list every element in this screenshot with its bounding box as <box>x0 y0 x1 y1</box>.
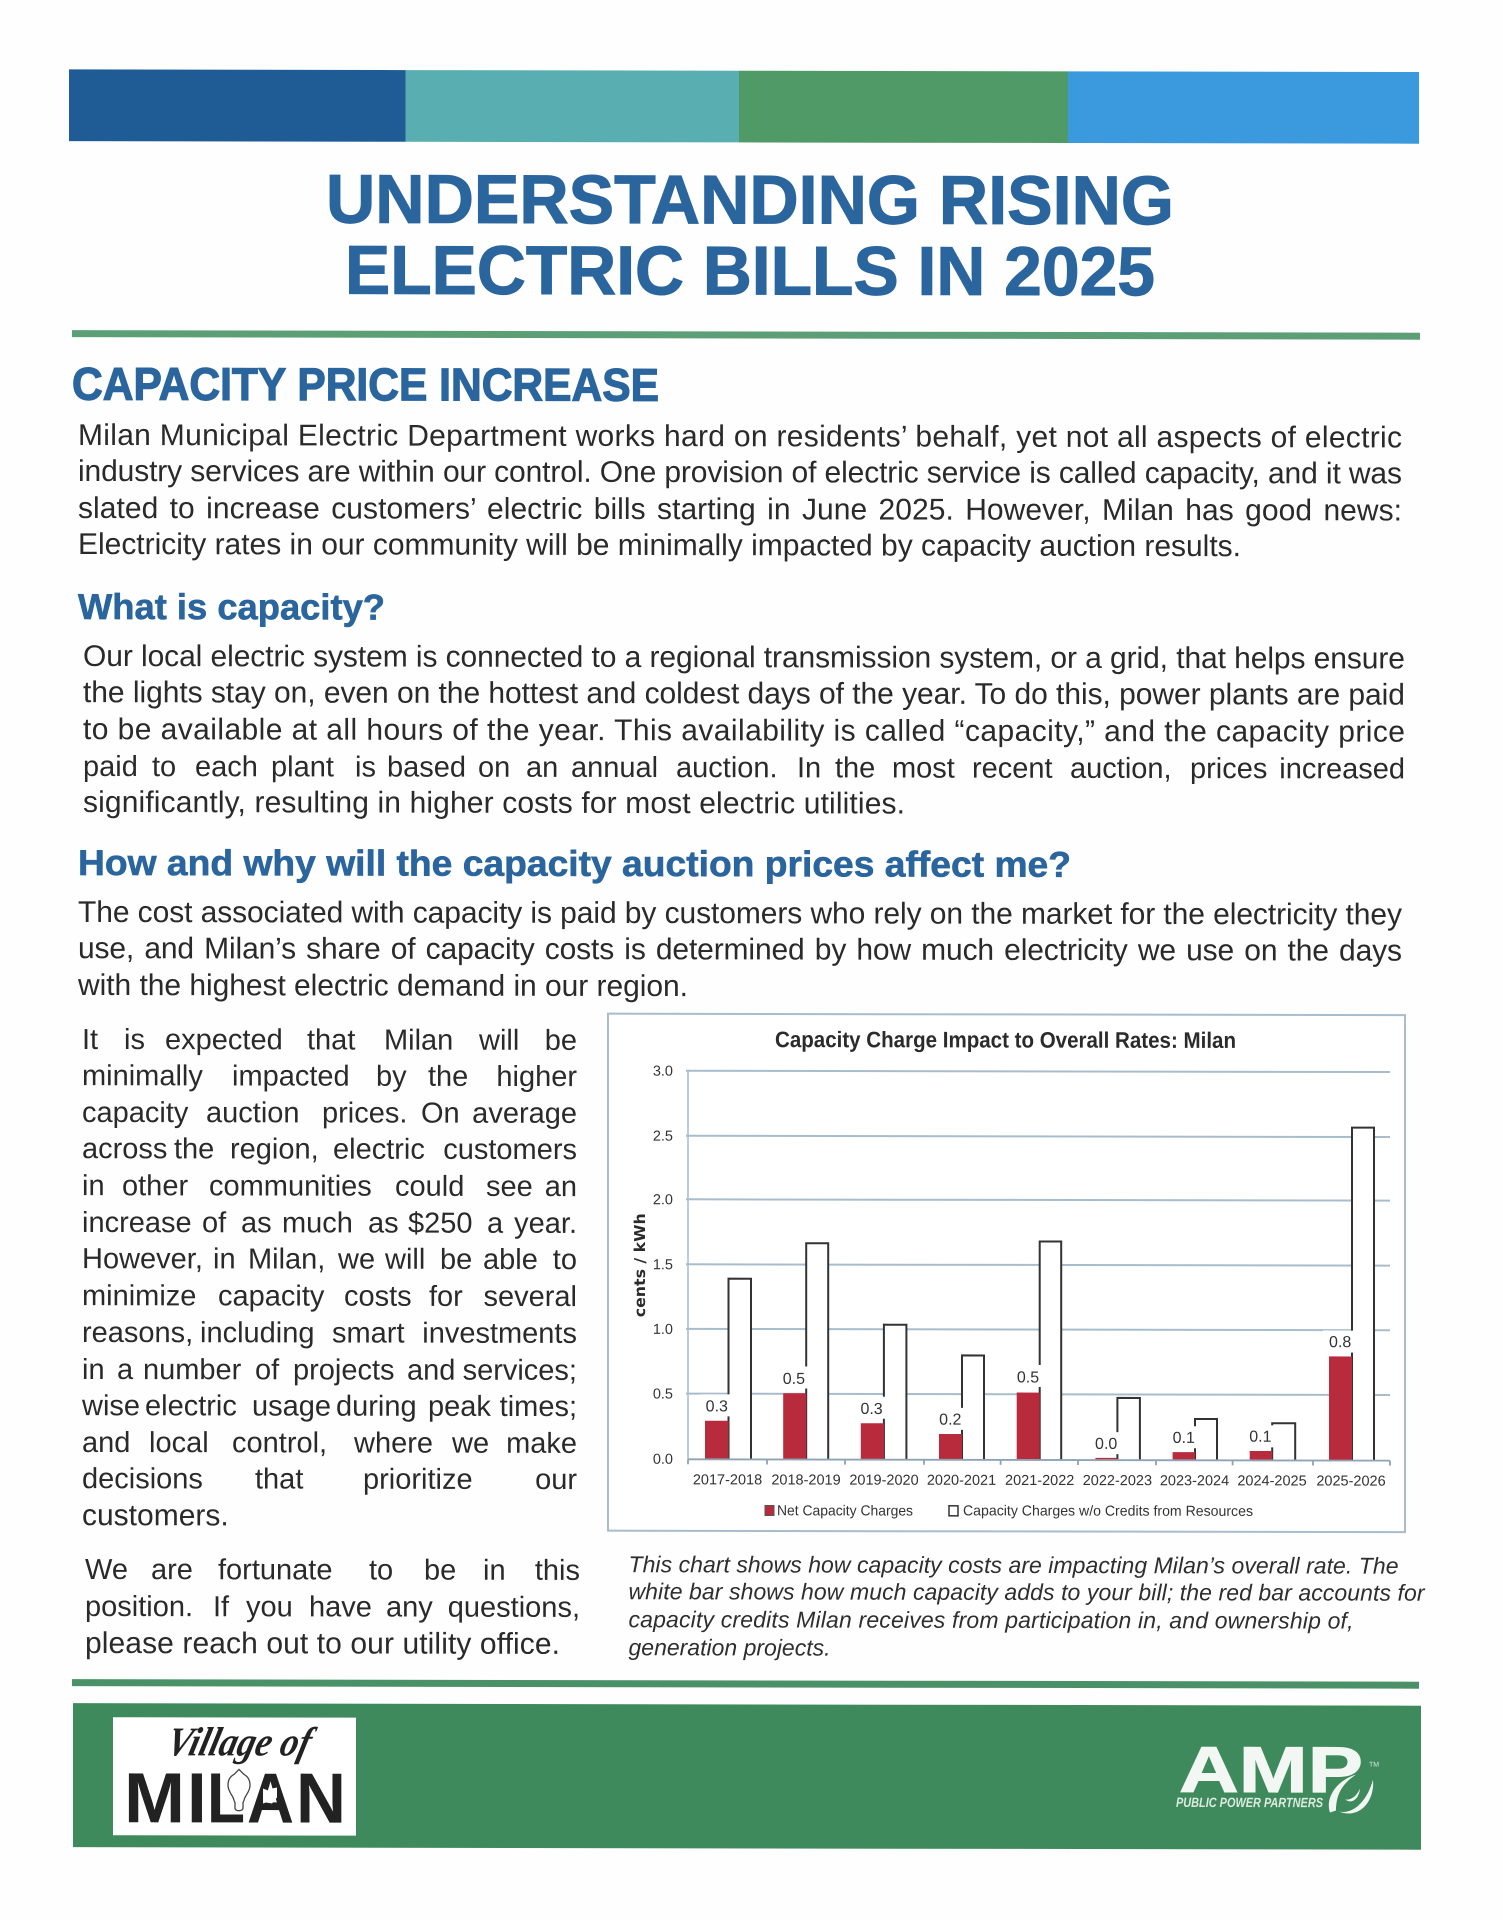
grid lines <box>686 1071 1390 1461</box>
paragraph: what is capacity: to <box>152 751 176 783</box>
left column paragraph: expected impact: customers. <box>82 1499 229 1532</box>
red bars: net capacity charges <box>705 1355 1352 1460</box>
logo: Village of Milan: N <box>296 1760 346 1839</box>
x axis labels: 2024-2025 <box>1237 1473 1307 1489</box>
left column paragraph: expected impact: projects <box>293 1354 395 1387</box>
title: ELECTRIC BILLS IN 2025 <box>345 232 1155 310</box>
logo: AMP Public Power Partners <box>1176 1733 1379 1814</box>
logo: AMP Public Power Partners: PUBLIC POWER PARTNERS <box>1176 1795 1323 1810</box>
paragraph: what is capacity: the lights stay on, even on the hottest and coldest days of the year. To do this, power plants are paid <box>83 676 1405 712</box>
chart caption <box>628 1551 1426 1662</box>
left column paragraph: expected impact: auction <box>206 1097 300 1129</box>
paragraph: what is capacity: prices <box>1190 753 1267 785</box>
paragraph: what is capacity: Our local electric system is connected to a regional transmission system, or a grid, that helps ensure <box>83 640 1405 675</box>
paragraph: what is capacity: each <box>195 751 258 783</box>
left column paragraph: expected impact: region, <box>230 1133 319 1166</box>
data labels: 0.2 <box>939 1412 962 1429</box>
left column paragraph: expected impact: that <box>255 1463 303 1496</box>
paragraph: what is capacity: the <box>835 752 875 784</box>
left column paragraph: fortunate position: We <box>85 1554 128 1586</box>
left column paragraph: expected impact <box>81 1024 577 1533</box>
left column paragraph: fortunate position: you <box>246 1591 293 1623</box>
left column paragraph: expected impact: and <box>407 1355 455 1387</box>
y axis tick labels: 1.5 <box>653 1257 673 1273</box>
left column paragraph: fortunate position: please reach out to our utility office. <box>85 1627 560 1661</box>
paragraph: what is capacity: is <box>355 751 376 784</box>
icon: Ohio outline <box>263 1787 277 1804</box>
left column paragraph: fortunate position: this <box>535 1555 580 1587</box>
heading: how and why: How and why will the capacity auction prices affect me? <box>78 842 1071 885</box>
left column paragraph: expected impact: much <box>282 1207 353 1239</box>
left column paragraph: expected impact: control, <box>232 1427 327 1459</box>
left column paragraph: expected impact: an <box>545 1171 577 1203</box>
x axis labels: 2025-2026 <box>1316 1474 1386 1490</box>
data labels: 0.1 <box>1173 1430 1195 1447</box>
left column paragraph: expected impact: capacity <box>82 1097 189 1129</box>
left column paragraph: expected impact: number <box>143 1354 242 1386</box>
y axis tick labels: 2.5 <box>653 1129 673 1145</box>
left column paragraph: expected impact: prioritize <box>363 1464 473 1496</box>
icon: AMP swirl <box>1329 1775 1373 1814</box>
left column paragraph: expected impact: local <box>149 1427 209 1459</box>
y axis tick labels <box>653 1064 673 1468</box>
left column paragraph: expected impact: and <box>82 1427 130 1459</box>
left column paragraph: fortunate position <box>85 1554 580 1661</box>
x axis labels: 2022-2023 <box>1083 1473 1152 1489</box>
paragraph: what is capacity: based <box>387 752 466 784</box>
left column paragraph: fortunate position: in <box>483 1555 506 1587</box>
paragraph: what is capacity: recent <box>972 753 1053 785</box>
data labels: 0.3 <box>706 1398 728 1415</box>
left column paragraph: expected impact: costs <box>344 1281 412 1313</box>
chart legend <box>765 1503 1253 1520</box>
left column paragraph: expected impact: be <box>440 1244 472 1276</box>
left column paragraph: expected impact: impacted <box>232 1060 350 1093</box>
heading: capacity price increase: CAPACITY PRICE INCREASE <box>72 358 659 411</box>
left column paragraph: expected impact: usage <box>252 1390 331 1423</box>
left column paragraph: expected impact: we <box>337 1244 375 1276</box>
title <box>326 161 1174 310</box>
left column paragraph: expected impact: by <box>376 1061 407 1093</box>
x axis labels <box>693 1472 1386 1490</box>
left column paragraph: expected impact: minimize <box>82 1280 196 1312</box>
left column paragraph: expected impact: several <box>484 1281 577 1313</box>
left column paragraph: expected impact: higher <box>496 1061 577 1093</box>
left column paragraph: expected impact: decisions <box>82 1463 203 1495</box>
left column paragraph: expected impact: as <box>241 1207 272 1239</box>
left column paragraph: fortunate position: are <box>151 1554 193 1586</box>
left column paragraph: expected impact: will <box>384 1244 425 1276</box>
logo: Village of Milan: A <box>247 1759 294 1839</box>
data labels <box>706 1333 1351 1453</box>
bar chart: capacity charge impact <box>608 1014 1405 1532</box>
left column paragraph: expected impact: year. <box>514 1208 577 1240</box>
left column paragraph: expected impact: a <box>487 1208 504 1240</box>
left column paragraph: expected impact: average <box>472 1098 577 1130</box>
intro paragraph: slated to increase customers’ electric bills starting in June 2025. However, Milan has good news: <box>78 492 1402 527</box>
left column paragraph: expected impact: smart <box>332 1317 404 1350</box>
data labels: 0.1 <box>1249 1429 1272 1446</box>
chart caption: This chart shows how capacity costs are impacting Milan’s overall rate. The <box>628 1551 1398 1579</box>
left column paragraph: expected impact: On <box>421 1098 460 1130</box>
data labels: 0.5 <box>1017 1369 1039 1386</box>
logo: Village of Milan: M <box>124 1759 185 1838</box>
paragraph: how and why: use, and Milan’s share of capacity costs is determined by how much electricity we use on the days <box>78 932 1402 968</box>
left column paragraph: expected impact: in <box>82 1170 105 1202</box>
left column paragraph: expected impact: expected <box>165 1024 283 1056</box>
left column paragraph: expected impact: It <box>82 1024 98 1056</box>
footer band <box>73 1703 1421 1850</box>
logo: Village of Milan: I <box>187 1759 207 1838</box>
y axis tick labels: 0.5 <box>653 1387 673 1403</box>
chart title: Capacity Charge Impact to Overall Rates: Milan <box>775 1027 1236 1053</box>
left column paragraph: expected impact: to <box>553 1244 577 1276</box>
left column paragraph: expected impact: we <box>451 1428 489 1460</box>
x axis <box>688 1459 1390 1466</box>
paragraph: what is capacity: increased <box>1279 753 1405 785</box>
intro paragraph: Electricity rates in our community will be minimally impacted by capacity auction results. <box>78 528 1241 563</box>
x axis labels: 2017-2018 <box>693 1472 762 1488</box>
white bars: capacity charges without credits <box>728 1126 1374 1460</box>
intro paragraph <box>78 419 1402 563</box>
chart legend: Net Capacity Charges <box>777 1503 913 1520</box>
y axis title: cents / kWh <box>631 1213 649 1317</box>
x axis labels: 2023-2024 <box>1160 1473 1229 1489</box>
left column paragraph: expected impact: communities <box>209 1170 372 1203</box>
left column paragraph: fortunate position: to <box>369 1555 393 1587</box>
data labels: 0.8 <box>1329 1334 1351 1351</box>
paragraph: what is capacity <box>83 640 1405 821</box>
data labels: 0.3 <box>860 1401 883 1418</box>
left column paragraph: expected impact: prices. <box>322 1097 407 1130</box>
chart caption: generation projects. <box>628 1634 830 1661</box>
x axis labels: 2018-2019 <box>771 1472 841 1489</box>
left column paragraph: expected impact: $250 <box>408 1208 473 1240</box>
left column paragraph: expected impact: electric <box>145 1390 237 1422</box>
chart caption: white bar shows how much capacity adds to your bill; the red bar accounts for <box>628 1578 1426 1606</box>
left column paragraph: expected impact: Milan, <box>248 1243 325 1276</box>
left column paragraph: expected impact: customers <box>443 1134 577 1166</box>
title: UNDERSTANDING RISING <box>326 161 1174 239</box>
left column paragraph: fortunate position: any <box>386 1592 433 1624</box>
left column paragraph: expected impact: is <box>124 1024 145 1056</box>
paragraph: how and why: with the highest electric demand in our region. <box>77 969 688 1003</box>
left column paragraph: fortunate position: questions, <box>448 1592 580 1624</box>
left column paragraph: expected impact: in <box>82 1354 105 1386</box>
intro paragraph: Milan Municipal Electric Department works hard on residents’ behalf, yet not all aspects of electric <box>78 419 1402 454</box>
paragraph: how and why <box>77 896 1402 1004</box>
left column paragraph: expected impact: across <box>82 1133 167 1165</box>
left column paragraph: expected impact: our <box>535 1464 577 1496</box>
left column paragraph: fortunate position: have <box>309 1591 372 1624</box>
paragraph: what is capacity: auction, <box>1070 753 1172 785</box>
left column paragraph: expected impact: capacity <box>218 1280 325 1313</box>
chart caption: capacity credits Milan receives from participation in, and ownership of, <box>628 1606 1353 1634</box>
left column paragraph: expected impact: peak <box>428 1391 491 1423</box>
paragraph: what is capacity: significantly, resulting in higher costs for most electric utilities. <box>83 786 905 821</box>
paragraph: what is capacity: annual <box>571 752 658 784</box>
paragraph: what is capacity: most <box>892 752 955 785</box>
left column paragraph: fortunate position: position. <box>85 1591 193 1623</box>
paragraph: what is capacity: In <box>797 752 821 784</box>
y axis tick labels: 3.0 <box>653 1064 673 1080</box>
paragraph: what is capacity: an <box>526 752 558 784</box>
left column paragraph: expected impact: where <box>353 1427 433 1460</box>
y axis tick labels: 0.0 <box>653 1452 673 1468</box>
left column paragraph: expected impact: investments <box>422 1318 577 1350</box>
left column paragraph: expected impact: be <box>545 1025 577 1057</box>
y axis tick labels: 1.0 <box>653 1322 673 1338</box>
left column paragraph: expected impact: of <box>202 1207 227 1239</box>
left column paragraph: fortunate position: If <box>213 1591 230 1623</box>
left column paragraph: fortunate position: be <box>424 1555 456 1587</box>
chart legend: Capacity Charges w/o Credits from Resources <box>963 1503 1253 1520</box>
left column paragraph: expected impact: minimally <box>82 1060 203 1092</box>
intro paragraph: industry services are within our control. One provision of electric service is called capacity, and it was <box>78 455 1402 490</box>
left column paragraph: expected impact: the <box>174 1133 214 1165</box>
logo: AMP Public Power Partners: AMP <box>1179 1733 1363 1806</box>
left column paragraph: expected impact: including <box>200 1317 314 1349</box>
left column paragraph: expected impact: a <box>117 1354 134 1386</box>
paragraph: what is capacity: plant <box>271 751 334 783</box>
left column paragraph: expected impact: in <box>213 1243 236 1275</box>
left column paragraph: expected impact: during <box>336 1391 417 1423</box>
paragraph: what is capacity: to be available at all hours of the year. This availability is called “capacity,” and the capacity price <box>83 713 1405 749</box>
left column paragraph: expected impact: could <box>395 1171 464 1203</box>
left column paragraph: expected impact: make <box>506 1428 577 1460</box>
left column paragraph: expected impact: see <box>486 1171 533 1203</box>
paragraph: how and why: The cost associated with capacity is paid by customers who rely on the market for the electricity they <box>78 896 1402 931</box>
y axis tick labels: 2.0 <box>653 1192 673 1208</box>
data label backgrounds <box>700 1329 1357 1455</box>
left column paragraph: expected impact: services; <box>463 1355 577 1387</box>
top colour band <box>69 69 1419 144</box>
x axis labels: 2021-2022 <box>1005 1473 1074 1489</box>
left column paragraph: expected impact: able <box>483 1244 538 1276</box>
logo: Village of Milan <box>113 1717 356 1839</box>
paragraph: what is capacity: auction. <box>676 752 778 784</box>
x axis labels: 2019-2020 <box>849 1473 919 1489</box>
left column paragraph: expected impact: will <box>478 1025 519 1057</box>
left column paragraph: expected impact: as <box>368 1207 399 1240</box>
left column paragraph: expected impact: of <box>255 1354 280 1386</box>
left column paragraph: expected impact: However, <box>82 1243 203 1275</box>
icon: light bulb <box>228 1769 250 1811</box>
logo: AMP Public Power Partners: TM <box>1369 1762 1379 1769</box>
paragraph: what is capacity: on <box>478 752 510 784</box>
left column paragraph: expected impact: that <box>307 1024 355 1056</box>
data labels: 0.5 <box>783 1371 805 1388</box>
left column paragraph: fortunate position: fortunate <box>218 1554 332 1586</box>
left column paragraph: expected impact: Milan <box>384 1025 453 1057</box>
left column paragraph: expected impact: reasons, <box>82 1317 193 1349</box>
left column paragraph: expected impact: wise <box>81 1390 140 1422</box>
logo: Village of Milan: Village of <box>163 1720 320 1765</box>
left column paragraph: expected impact: other <box>122 1170 188 1202</box>
left column paragraph: expected impact: increase <box>82 1207 192 1239</box>
left column paragraph: expected impact: for <box>429 1281 463 1313</box>
data labels: 0.0 <box>1095 1436 1117 1453</box>
paragraph: what is capacity: paid <box>83 751 138 783</box>
logo: Village of Milan: L <box>207 1759 245 1838</box>
left column paragraph: expected impact: times; <box>500 1391 577 1423</box>
heading: what is capacity: What is capacity? <box>78 586 385 628</box>
left column paragraph: expected impact: the <box>428 1061 468 1093</box>
left column paragraph: expected impact: electric <box>333 1134 425 1166</box>
x axis labels: 2020-2021 <box>927 1473 996 1489</box>
